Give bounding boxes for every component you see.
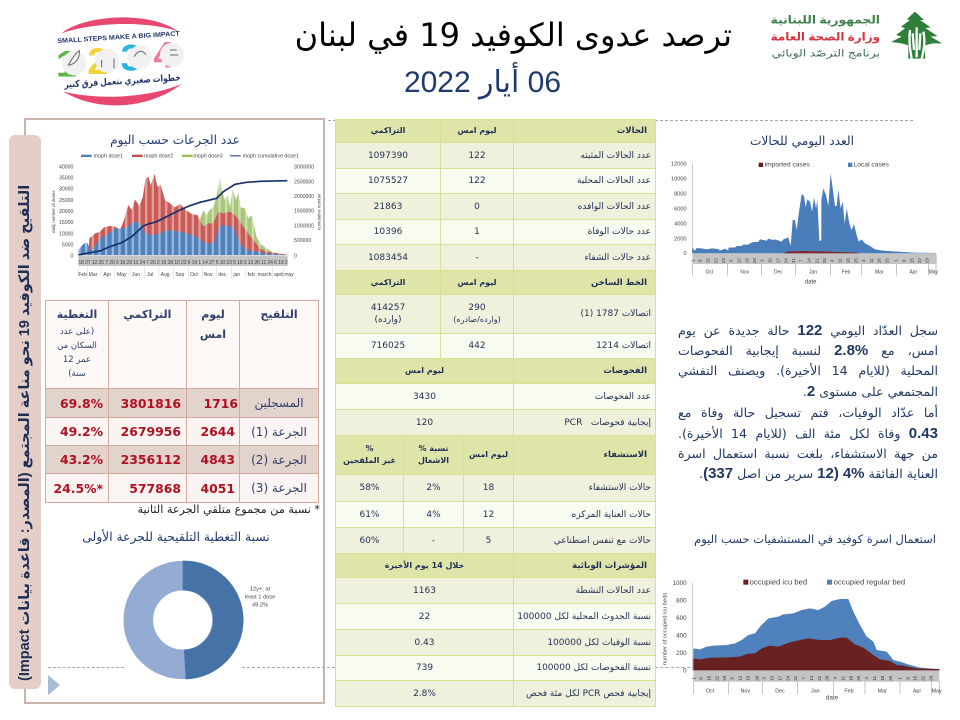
date ticks (692, 675, 934, 681)
table: cases, hotline, tests, hospitalisation, indicators: حالات العناية المركزه (572, 510, 651, 520)
row: dose 2 (46, 446, 318, 474)
regular beds area (693, 599, 939, 670)
chart: daily vaccine doses: dec (218, 272, 227, 278)
table: cases, hotline, tests, hospitalisation, indicators: % نسبة (418, 444, 449, 453)
text block: daily summary: 0.43 وفاة لكل مئة الف (للايام 14 الأخيرة). (678, 425, 938, 442)
chart: daily vaccine doses: May (117, 272, 127, 278)
date ticks: 21 (814, 258, 819, 263)
chart: daily vaccine doses: 3000000 (294, 165, 314, 171)
table: cases, hotline, tests, hospitalisation, indicators: غير الملقحين (343, 456, 396, 465)
date ticks: 26 (754, 675, 759, 681)
date ticks: 5 (729, 259, 734, 262)
chart: daily vaccine doses: 1500000 (294, 209, 314, 215)
logo: small steps campaign: 3 (121, 37, 141, 79)
table: cases, hotline, tests, hospitalisation, indicators: % (365, 444, 374, 453)
table: cases, hotline, tests, hospitalisation, indicators: 4% (426, 510, 441, 520)
table: cases, hotline, tests, hospitalisation, indicators: عدد الفحوصات (595, 392, 651, 402)
table: cases, hotline, tests, hospitalisation, indicators: نسبة الحدوث المحلية لكل 100000 (517, 612, 651, 622)
logo: small steps campaign: 1 (56, 43, 77, 85)
text block: daily summary: سجل العدّاد اليومي 122 حالة جديدة عن يوم (678, 322, 938, 339)
date ticks: 18 (880, 675, 885, 681)
table: cases, hotline, tests, hospitalisation, indicators: 2.8% (413, 688, 436, 698)
date ticks: 17 (775, 258, 780, 263)
chart: daily cases: 12000 (671, 162, 687, 168)
date ticks: 25 (853, 258, 858, 263)
chart: occupied beds: 200 (676, 650, 687, 657)
date ticks: 11 (840, 676, 845, 681)
table: cases, hotline, tests, hospitalisation, indicators: 60% (359, 536, 380, 546)
row: dose 2: 2356112 (121, 452, 181, 467)
date ticks: 19 (744, 258, 749, 263)
date ticks: 25 (856, 675, 861, 681)
chart: daily vaccine doses: Jun (132, 272, 140, 278)
table: cases, hotline, tests, hospitalisation, indicators: - (432, 536, 435, 546)
row: dose 3: 24.5%* (54, 480, 103, 496)
date ticks: 18 (848, 675, 853, 681)
chart: coverage donut: least 1 dose (245, 594, 275, 600)
table: cases, hotline, tests, hospitalisation, indicators: 120 (416, 418, 433, 428)
table: cases, hotline, tests, hospitalisation, indicators: ليوم امس (458, 126, 496, 135)
chart: occupied beds: Jan (811, 688, 820, 694)
date ticks: 22 (921, 675, 926, 681)
chart: occupied beds: Dec (775, 688, 785, 694)
chart: daily vaccine doses: Feb (78, 272, 87, 278)
table: cases, hotline, tests, hospitalisation, indicators: 1 (474, 227, 480, 237)
axes labels: 15000 (59, 220, 73, 226)
table: cases, hotline, tests, hospitalisation, indicators: 442 (468, 341, 486, 351)
header row: سنة) (68, 369, 86, 379)
chart: daily cases: Apr (909, 270, 918, 276)
chart: daily vaccine doses: 2500000 (294, 179, 314, 185)
date ticks: 1 (897, 677, 902, 680)
chart: occupied beds (662, 578, 942, 702)
date ticks (691, 258, 930, 263)
chart: occupied beds: 400 (676, 633, 687, 640)
axes labels: 35000 (59, 176, 73, 182)
heading: hospital bed use: استعمال اسرة كوفيد في المستشفيات حسب اليوم (694, 532, 936, 546)
chart: daily cases: 10000 (671, 177, 687, 183)
date ticks: 24 (785, 675, 790, 681)
date ticks: 8 (905, 677, 910, 680)
chart: occupied beds: Oct (706, 688, 715, 694)
date ticks: 14 (809, 675, 814, 681)
date ticks: 18 (877, 258, 882, 263)
table: cases, hotline, tests, hospitalisation, indicators: 290 (468, 303, 486, 313)
arrow marker (48, 675, 60, 695)
date ticks: 22 (917, 258, 922, 263)
chart: occupied beds: number of occupied icu beds (662, 593, 668, 665)
logo: ministry of public health (771, 12, 942, 60)
header row: (على عدد (60, 327, 94, 337)
icu beds area (693, 638, 939, 670)
chart: daily vaccine doses: Jul (147, 272, 153, 278)
date ticks: 24 (783, 258, 788, 263)
table: cases, hotline, tests, hospitalisation, indicators: عدد الحالات النشطة (576, 586, 651, 596)
table: cases, hotline, tests, hospitalisation, indicators: (وارده) (375, 315, 401, 325)
table: cases, hotline, tests, hospitalisation, indicators: عدد حالات الوفاة (588, 227, 651, 237)
table: cases, hotline, tests, hospitalisation, indicators: نسبة الوفيات لكل 100000 (547, 638, 651, 648)
date ticks: 29 (722, 675, 727, 681)
chart: coverage donut (124, 560, 275, 680)
header row: عمر 12 (63, 355, 91, 365)
date ticks: 18 (845, 258, 850, 263)
chart: daily cases: Oct (705, 270, 714, 276)
table: cases, hotline, tests, hospitalisation, indicators: خلال 14 يوم الأخيرة (385, 560, 464, 570)
chart: daily vaccine doses: Mar (89, 272, 98, 278)
row: dose 1: 2644 (200, 424, 235, 439)
row: dose 3 (46, 474, 318, 502)
chart: daily cases: 0 (684, 251, 687, 257)
date ticks: 29 (929, 675, 934, 681)
legend: imported cases (765, 162, 810, 169)
date ticks: 12 (736, 258, 741, 263)
date ticks: 7 (801, 677, 806, 680)
panel: vaccination (9, 118, 335, 704)
logo: small steps campaign: 4 (153, 33, 174, 75)
chart: daily vaccine doses: april (274, 272, 283, 278)
logo: small steps campaign (56, 17, 184, 106)
table: cases, hotline, tests, hospitalisation, indicators: 21863 (374, 202, 402, 212)
date ticks: 8 (698, 677, 703, 680)
date ticks: 19 (745, 675, 750, 681)
axes labels: 20000 (59, 209, 73, 215)
date ticks: 15 (706, 675, 711, 681)
chart: occupied beds: 800 (676, 598, 687, 605)
table: cases, hotline, tests, hospitalisation, indicators: - (475, 252, 479, 262)
chart: occupied beds: 600 (676, 615, 687, 622)
legend: moph dose2 (144, 154, 173, 160)
row: registered: المسجلين (254, 396, 304, 410)
row: dose 3: الجرعة (3) (251, 481, 307, 495)
row: registered: 1716 (204, 396, 238, 410)
table: cases, hotline, tests, hospitalisation, indicators: الاستشفاء (604, 450, 647, 460)
chart: daily cases: Jan (809, 270, 817, 276)
header row (46, 301, 318, 502)
row: dose 1: 2679956 (121, 424, 181, 439)
date ticks: 1 (691, 259, 696, 262)
table: cases, hotline, tests, hospitalisation, indicators: عدد الحالات المثبته (580, 150, 651, 160)
chart: daily vaccine doses: daily number of doses (51, 190, 56, 233)
chart: daily cases: 4000 (674, 221, 687, 227)
table: cases, hotline, tests, hospitalisation, indicators: (وارده/صادره) (453, 315, 501, 324)
chart: occupied beds: 0 (683, 668, 687, 675)
table: cases, hotline, tests, hospitalisation, indicators: عدد الحالات المحلية (577, 176, 651, 186)
heading: first dose coverage: نسبة التغطية التلقيحية للجرعة الأولى (82, 530, 270, 544)
table: cases, hotline, tests, hospitalisation, indicators: نسبة الفحوصات لكل 100000 (536, 663, 651, 673)
legend: moph dose1 (94, 154, 123, 160)
table: cases, hotline, tests, hospitalisation, indicators: 22 (419, 612, 430, 622)
text block: daily summary: أما عدّاد الوفيات، فتم تسجيل حالة وفاة مع (678, 405, 938, 420)
axes labels: 0 (70, 253, 73, 259)
axes labels: 25000 (59, 198, 73, 204)
chart: coverage donut: 12y+: at (250, 586, 271, 592)
chart: daily vaccine doses: feb (248, 272, 255, 278)
chart: daily cases: Feb (842, 270, 851, 276)
table: cases, hotline, tests, hospitalisation, indicators: الفحوصات (603, 366, 647, 376)
axes labels: 30000 (59, 187, 73, 193)
date ticks: 21 (817, 675, 822, 681)
chart: daily vaccine doses: 1000000 (294, 223, 314, 229)
logo: ministry of public health: وزارة الصحة العامة (771, 31, 880, 43)
table: cases, hotline, tests, hospitalisation, indicators: 12 (483, 510, 494, 520)
date ticks: 29 (721, 258, 726, 263)
table: cases, hotline, tests, hospitalisation, indicators: الحالات (617, 126, 647, 136)
table: cases, hotline, tests, hospitalisation, indicators: الاشغال (418, 456, 449, 465)
chart: occupied beds: Feb (844, 688, 854, 694)
date ticks: 28 (822, 258, 827, 263)
table: cases, hotline, tests, hospitalisation, indicators (335, 119, 656, 707)
chart: daily vaccine doses: 18 27 12 25 7 20 3 16 29 11 24 7 20 2 15 28 10 23 6 19 1 14 27 5 10 23 5 18 3 13 26 11 24 6 19 2 (78, 260, 288, 266)
table: vaccination (45, 300, 319, 503)
legend (759, 162, 889, 169)
row: registered: 3801816 (121, 396, 181, 410)
cumulative line (78, 181, 287, 255)
date ticks: 1 (692, 677, 697, 680)
date ticks: 10 (768, 258, 773, 263)
date ticks: 11 (869, 258, 874, 263)
chart: occupied beds: Nov (741, 688, 750, 694)
table: cases, hotline, tests, hospitalisation, indicators: الخط الساخن (591, 278, 647, 288)
logo: small steps campaign: 2 (87, 40, 108, 82)
text block: daily summary: العناية الفائقة 4% (12 سرير من اصل 337). (699, 465, 938, 482)
table: cases, hotline, tests, hospitalisation, indicators: عدد حالات الشفاء (584, 252, 651, 262)
date ticks: 26 (752, 258, 757, 263)
table: cases, hotline, tests, hospitalisation, indicators: 1075527 (368, 176, 408, 186)
table: cases, hotline, tests, hospitalisation, indicators: إيجابية فحوصات PCR (564, 418, 651, 428)
table: cases, hotline, tests, hospitalisation, indicators: 1083454 (368, 252, 408, 262)
chart: daily vaccine doses: march (258, 272, 272, 278)
sidebar heading: vaccination toward community immunity: التلقيح ضد الكوفيد 19 نحو مناعة المجتمع (المصدر: قاعدة بيانات Impact) (17, 185, 33, 681)
chart: daily vaccine doses: Aug (161, 272, 170, 278)
date ticks: 4 (830, 259, 835, 262)
table: cases, hotline, tests, hospitalisation, indicators: عدد الحالات الوافده (578, 202, 651, 212)
header row: امس (200, 328, 226, 341)
table: cases, hotline, tests, hospitalisation, indicators: 3430 (413, 392, 436, 402)
chart: daily vaccine doses: jan (232, 272, 240, 278)
chart: daily vaccine doses (51, 154, 322, 278)
table: cases, hotline, tests, hospitalisation, indicators: 61% (359, 510, 380, 520)
header row: ليوم (201, 308, 225, 321)
date ticks: 14 (807, 258, 812, 263)
chart: daily cases: 6000 (674, 206, 687, 212)
axes labels (59, 165, 73, 259)
table: cases, hotline, tests, hospitalisation, indicators: ليوم امس (469, 450, 508, 459)
table: cases, hotline, tests, hospitalisation, indicators: إيجابية فحص PCR لكل مئة فحص (526, 688, 651, 698)
chart: daily vaccine doses: Sep (175, 272, 184, 278)
table: cases, hotline, tests, hospitalisation, indicators: 58% (359, 483, 380, 493)
footnote: * نسبة من مجموع متلقي الجرعة الثانية (138, 503, 320, 516)
table: cases, hotline, tests, hospitalisation, indicators: اتصالات 1214 (596, 341, 651, 351)
date ticks: 10 (770, 675, 775, 681)
table: cases, hotline, tests, hospitalisation, indicators: 1097390 (368, 150, 408, 160)
chart: daily vaccine doses: 500000 (294, 238, 311, 244)
chart: daily cases: Nov (740, 270, 750, 276)
date ticks: 8 (901, 259, 906, 262)
axes labels: 10000 (59, 231, 73, 237)
header row: التراكمي (124, 308, 171, 321)
sidebar heading: vaccination toward community immunity (9, 135, 41, 689)
logo: small steps campaign: خطوات صغيري بتعمل فرق كبير (63, 72, 181, 91)
date ticks: 15 (913, 675, 918, 681)
chart: daily vaccine doses: may (284, 272, 294, 278)
header row: السكان من (57, 341, 97, 351)
legend: occupied icu bed (750, 578, 807, 587)
table: cases, hotline, tests, hospitalisation, indicators: حالات مع تنفس اصطناعي (554, 536, 651, 546)
heading: daily doses: عدد الجرعات حسب اليوم (110, 133, 240, 147)
table: cases, hotline, tests, hospitalisation, indicators: 0 (474, 202, 480, 212)
date band (78, 255, 288, 266)
chart: occupied beds: 1000 (673, 580, 687, 587)
stacked areas (78, 177, 287, 255)
chart: daily vaccine doses: 2000000 (294, 194, 314, 200)
date ticks: 8 (697, 259, 702, 262)
table: cases, hotline, tests, hospitalisation, indicators: 10396 (374, 227, 402, 237)
chart: daily cases: Dec (774, 270, 783, 276)
table: cases, hotline, tests, hospitalisation, indicators: حالات الاستشفاء (589, 483, 651, 493)
chart: occupied beds: date (826, 695, 839, 702)
row: dose 1 (46, 418, 318, 446)
date ticks: 3 (762, 677, 767, 680)
chart: daily vaccine doses: 0 (294, 253, 297, 259)
date ticks: 12 (737, 675, 742, 681)
chart: coverage donut: 49.2% (252, 602, 268, 608)
text block: daily summary: من جهة الاستشفاء، بلغت نسبة استعمال اسرة (678, 446, 938, 461)
chart: daily cases: 8000 (674, 191, 687, 197)
date ticks: 1 (894, 259, 899, 262)
legend (743, 578, 905, 587)
logo: ministry of public health: الجمهورية اللبنانية (771, 14, 880, 26)
date ticks: 25 (888, 675, 893, 681)
local cases area (692, 173, 936, 253)
table: cases, hotline, tests, hospitalisation, indicators: 122 (468, 176, 486, 186)
row: dose 3: 577868 (129, 480, 181, 496)
table: cases, hotline, tests, hospitalisation, indicators: المؤشرات الوبائية (572, 560, 647, 570)
date ticks: 22 (714, 675, 719, 681)
chart: daily vaccine doses: Apr (103, 272, 111, 278)
legend: Local cases (854, 162, 889, 169)
date ticks: 28 (825, 675, 830, 681)
date ticks: 17 (777, 675, 782, 681)
chart: daily cases: May (929, 270, 939, 276)
date ticks: 29 (925, 258, 930, 263)
chart: occupied beds: May (932, 688, 942, 694)
legend: moph dose3 (193, 154, 223, 160)
header row: التغطية (57, 308, 97, 321)
table: cases, hotline, tests, hospitalisation, indicators: 122 (468, 150, 486, 160)
text block: daily summary: امس، مع 2.8% لنسبة إيجابية الفحوصات (678, 342, 938, 359)
date: 06 أيار 2022 (404, 66, 561, 99)
table: cases, hotline, tests, hospitalisation, indicators: 1163 (413, 586, 436, 596)
table: cases, hotline, tests, hospitalisation, indicators: 0.43 (414, 638, 435, 648)
date ticks: 15 (705, 258, 710, 263)
table: cases, hotline, tests, hospitalisation, indicators: التراكمي (371, 278, 405, 286)
chart: daily vaccine doses: Oct (190, 272, 198, 278)
logo: small steps campaign: SMALL STEPS MAKE A BIG IMPACT (57, 31, 180, 45)
table: cases, hotline, tests, hospitalisation, indicators: 414257 (371, 303, 405, 313)
text block: daily summary (678, 320, 938, 486)
date ticks: 31 (791, 258, 796, 263)
table: cases, hotline, tests, hospitalisation, indicators: اتصالات 1787 (1) (580, 309, 651, 319)
axes labels: 5000 (62, 242, 73, 248)
logo: ministry of public health: برنامج الترصّد الوبائي (772, 49, 880, 60)
date ticks: 5 (730, 677, 735, 680)
chart: occupied beds: Apr (913, 688, 921, 694)
table: cases, hotline, tests, hospitalisation, indicators: التراكمي (371, 126, 405, 135)
date ticks: 22 (713, 258, 718, 263)
table: cases, hotline, tests, hospitalisation, indicators: 18 (483, 483, 494, 493)
date ticks: 4 (832, 677, 837, 680)
date ticks: 25 (885, 258, 890, 263)
row: dose 2: 43.2% (60, 452, 103, 467)
table: cases, hotline, tests, hospitalisation, indicators: 5 (486, 536, 491, 546)
heading: daily cases: العدد اليومي للحالات (750, 134, 854, 148)
chart: daily cases (671, 162, 939, 285)
header row: التلقيح (260, 308, 298, 321)
row: dose 1: 49.2% (60, 424, 103, 439)
text block: daily summary: المحلية (للايام 14 الأخيرة). ويصنف التفشي (678, 363, 938, 378)
chart: daily cases: 2000 (674, 236, 687, 242)
table: cases, hotline, tests, hospitalisation, indicators: ليوم امس (405, 366, 444, 375)
table: cases, hotline, tests, hospitalisation, indicators: 716025 (371, 341, 405, 351)
row: dose 2: الجرعة (2) (251, 452, 307, 466)
title: ترصد عدوى الكوفيد 19 في لبنان (295, 16, 732, 54)
chart: daily cases: date (805, 279, 817, 285)
chart: daily vaccine doses: cumulative number (317, 193, 322, 230)
legend (81, 154, 299, 160)
table: cases, hotline, tests, hospitalisation, indicators: ليوم امس (458, 278, 496, 286)
date ticks: 4 (864, 677, 869, 680)
date ticks: 11 (838, 258, 843, 263)
date ticks: 15 (909, 258, 914, 263)
text block: daily summary: المجتمعي على مستوى 2. (803, 383, 938, 400)
date ticks: 4 (861, 259, 866, 262)
legend: occupied regular bed (834, 578, 905, 587)
row: registered: 69.8% (60, 396, 103, 410)
date ticks: 31 (793, 675, 798, 681)
chart: occupied beds: Mar (878, 688, 887, 694)
row: dose 1: الجرعة (1) (251, 424, 307, 438)
chart: daily vaccine doses: Nov (204, 272, 213, 278)
date ticks: 3 (760, 259, 765, 262)
legend: moph cumulative dose1 (243, 154, 299, 160)
chart: daily cases: Mar (875, 270, 884, 276)
date ticks: 7 (799, 259, 804, 262)
axes labels: 40000 (59, 165, 73, 171)
row: dose 3: 4051 (200, 480, 235, 496)
row: dose 2: 4843 (200, 452, 235, 467)
row: registered (46, 388, 318, 418)
table: cases, hotline, tests, hospitalisation, indicators: 739 (416, 663, 433, 673)
table: cases, hotline, tests, hospitalisation, indicators: 2% (426, 483, 441, 493)
date ticks: 11 (872, 676, 877, 681)
